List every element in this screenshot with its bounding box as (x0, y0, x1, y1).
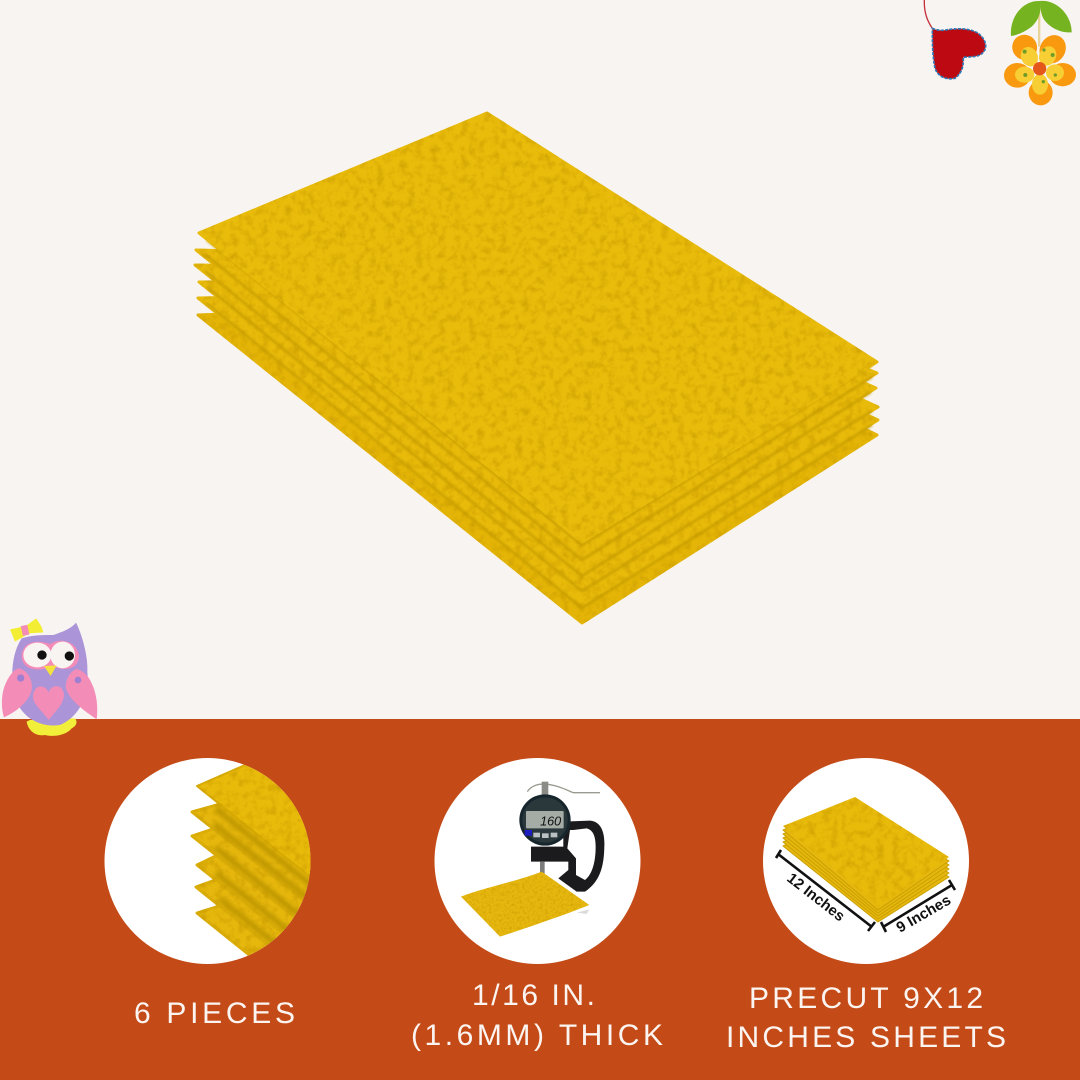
display (526, 811, 564, 828)
decoration: orange felt flower with green leaves (1004, 1, 1076, 105)
caption: thickness: 1/16 IN. (472, 979, 595, 1012)
icon circle: thickness gauge (434, 758, 640, 964)
icon circle: thickness gauge: 160 (540, 814, 561, 828)
main image: stack of six yellow felt sheets (195, 113, 878, 623)
caption: thickness: (1.6MM) THICK (411, 1019, 663, 1052)
spindle (540, 862, 545, 874)
icon circle: six pieces close-up (104, 758, 310, 964)
icon circle: sheet dimensions (763, 758, 969, 964)
shadow bands between sheets (212, 807, 309, 944)
dial (519, 794, 571, 846)
decoration: purple felt owl (2, 618, 97, 736)
dimension line: 9 inches (881, 880, 955, 936)
top sheet (196, 764, 310, 878)
wire lever (527, 784, 600, 793)
dimension line: 9 inches: 9 Inches (894, 892, 954, 936)
caption: sheet size: INCHES SHEETS (726, 1021, 1006, 1054)
dimension line: 12 inches (776, 850, 875, 931)
decoration: red felt heart with string (924, 0, 986, 79)
layered sheet edges (190, 791, 310, 956)
panel: bottom orange band (0, 719, 1080, 1080)
dimension line: 12 inches: 12 Inches (784, 870, 848, 925)
caption: 6 pieces: 6 PIECES (134, 997, 295, 1030)
caption: sheet size (726, 982, 1006, 1054)
gauge frame (531, 821, 604, 892)
caption: sheet size: PRECUT 9X12 (749, 982, 983, 1015)
single felt sheet (461, 872, 589, 937)
small sheet stack (783, 797, 949, 922)
caption: thickness (411, 979, 663, 1052)
